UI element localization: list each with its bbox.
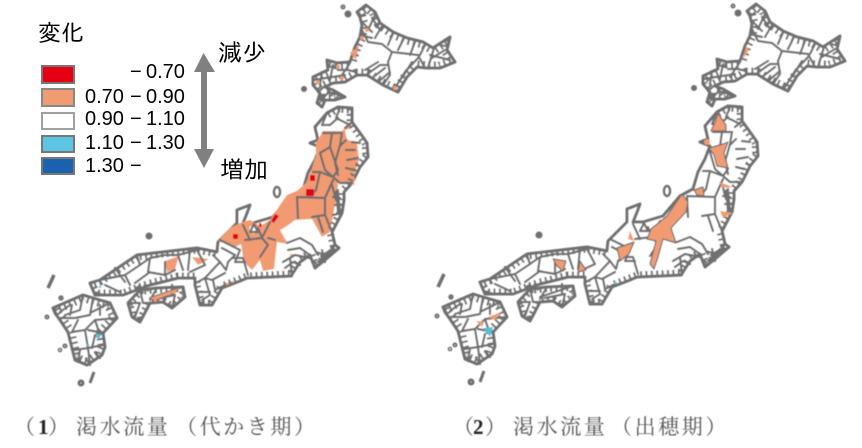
legend swatch: 1.10 to 1.30: 1.10 — [85, 132, 124, 154]
legend swatch: below 0.70 — [42, 61, 185, 83]
caption 2: （出穂期） — [611, 415, 729, 439]
caption 2: （ — [453, 415, 477, 439]
legend swatch: 0.70 to 0.90: − — [130, 86, 142, 108]
legend swatch: above 1.30: 1.30 — [85, 155, 124, 177]
icon: double-headed arrow — [194, 53, 215, 168]
legend swatch: above 1.30 — [42, 155, 142, 177]
caption 2: ） — [485, 415, 509, 439]
caption 1: 1 — [38, 415, 48, 439]
legend — [38, 20, 185, 177]
legend title: 変化 — [38, 20, 84, 46]
legend swatch: 0.70 to 0.90: 0.90 — [146, 86, 185, 108]
legend swatch: 0.70 to 0.90 — [42, 86, 185, 108]
legend swatch: 0.90 to 1.10: 1.10 — [146, 108, 185, 130]
legend swatch: 0.90 to 1.10: 0.90 — [85, 108, 124, 130]
caption 2 — [453, 415, 729, 439]
caption 1: （代かき期） — [176, 415, 318, 439]
map 1: low flow, puddling period — [46, 5, 455, 385]
caption 2: 渇水流量 — [513, 415, 607, 439]
legend swatch: 1.10 to 1.30 — [42, 132, 185, 154]
legend swatch: 0.90 to 1.10: − — [130, 108, 142, 130]
caption 1: 渇水流量 — [76, 415, 170, 439]
label: increase: 増加 — [220, 157, 268, 184]
label: decrease: 減少 — [218, 40, 266, 67]
legend swatch: below 0.70: 0.70 — [146, 61, 185, 83]
legend swatch: above 1.30: − — [130, 155, 142, 177]
legend swatch: below 0.70: − — [130, 61, 142, 83]
legend swatch: 0.90 to 1.10 — [42, 108, 185, 130]
caption 1 — [14, 415, 318, 439]
legend swatch: 1.10 to 1.30: − — [130, 132, 142, 154]
caption 1: （ — [14, 415, 38, 439]
caption 1: ） — [48, 415, 72, 439]
caption 2: 2 — [473, 415, 484, 439]
map 2: low flow, heading period — [436, 4, 845, 384]
legend swatch: 1.10 to 1.30: 1.30 — [146, 132, 185, 154]
legend swatch: 0.70 to 0.90: 0.70 — [85, 86, 124, 108]
